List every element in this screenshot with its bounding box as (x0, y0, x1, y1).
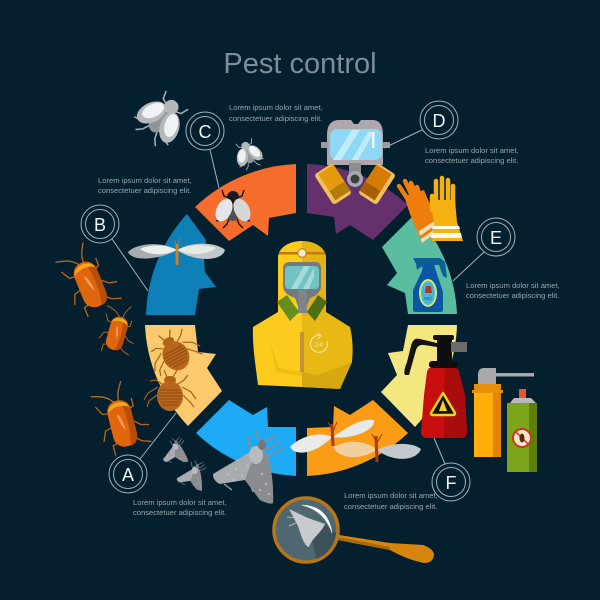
callout: C: C (198, 122, 212, 142)
segmented ring (145, 164, 457, 476)
segment: peach A (145, 325, 222, 426)
callout: E: Lorem ipsum dolor sit amet, (466, 281, 560, 290)
icon: black fly on orange (212, 190, 254, 228)
callout: A: consectetuer adipiscing elit. (133, 508, 226, 517)
segment: orange F (307, 400, 408, 476)
callout: D: Lorem ipsum dolor sit amet, (425, 146, 519, 155)
icon: blue spray bottle: ABC (423, 296, 433, 301)
callout: A: A (122, 465, 134, 485)
segment: purple D (307, 164, 408, 240)
icon: green aerosol can (507, 389, 537, 472)
callout: C (186, 103, 323, 188)
suit body (253, 312, 302, 387)
segment: bright blue A (196, 400, 296, 476)
callout: C: Lorem ipsum dolor sit amet, (229, 103, 323, 112)
icon: bed bugs (141, 321, 206, 411)
central figure in yellow protective suit (253, 241, 353, 389)
callout: A: Lorem ipsum dolor sit amet, (133, 498, 227, 507)
callout: A (109, 413, 227, 517)
callout: E (453, 218, 560, 300)
callout: B (81, 176, 192, 291)
zipper (300, 332, 304, 372)
icon: small fly (229, 136, 268, 173)
callout: F (344, 438, 470, 511)
central figure in yellow protective suit: 24 (315, 340, 323, 349)
callout: C: consectetuer adipiscing elit. (229, 114, 322, 123)
callout: F: consectetuer adipiscing elit. (344, 502, 437, 511)
callout: F: Lorem ipsum dolor sit amet, (344, 491, 438, 500)
callout: E: consectetuer adipiscing elit. (466, 291, 559, 300)
callout: B: consectetuer adipiscing elit. (98, 186, 191, 195)
segment: pale yellow F (381, 325, 457, 427)
segment: teal E (382, 214, 457, 314)
callout: D: consectetuer adipiscing elit. (425, 156, 518, 165)
gas mask visor (283, 262, 321, 306)
icon: red pressure sprayer (404, 335, 467, 438)
hood (278, 241, 302, 316)
callout: E: E (490, 228, 502, 248)
icon: gas mask (314, 120, 396, 205)
callout: B: Lorem ipsum dolor sit amet, (98, 176, 192, 185)
icon: blue spray bottle (413, 258, 447, 312)
icon: orange aerosol can (472, 368, 534, 457)
callout: D (384, 101, 519, 165)
title: Pest control (223, 48, 377, 80)
segment: blue B (146, 214, 216, 315)
callout: F: F (446, 473, 456, 493)
icon: moths (157, 432, 283, 504)
icon: protective gloves (399, 178, 463, 243)
icon: magnifying glass (274, 498, 434, 563)
callout: B: B (94, 215, 106, 235)
24 hour icon (310, 333, 327, 352)
icon: mosquito on blue (128, 237, 225, 265)
callout: D: D (432, 111, 446, 131)
icon: cockroaches (52, 236, 154, 458)
icon: termites on orange (290, 420, 421, 462)
segment: orange C (195, 164, 296, 241)
icon: large fly top left (125, 83, 198, 155)
